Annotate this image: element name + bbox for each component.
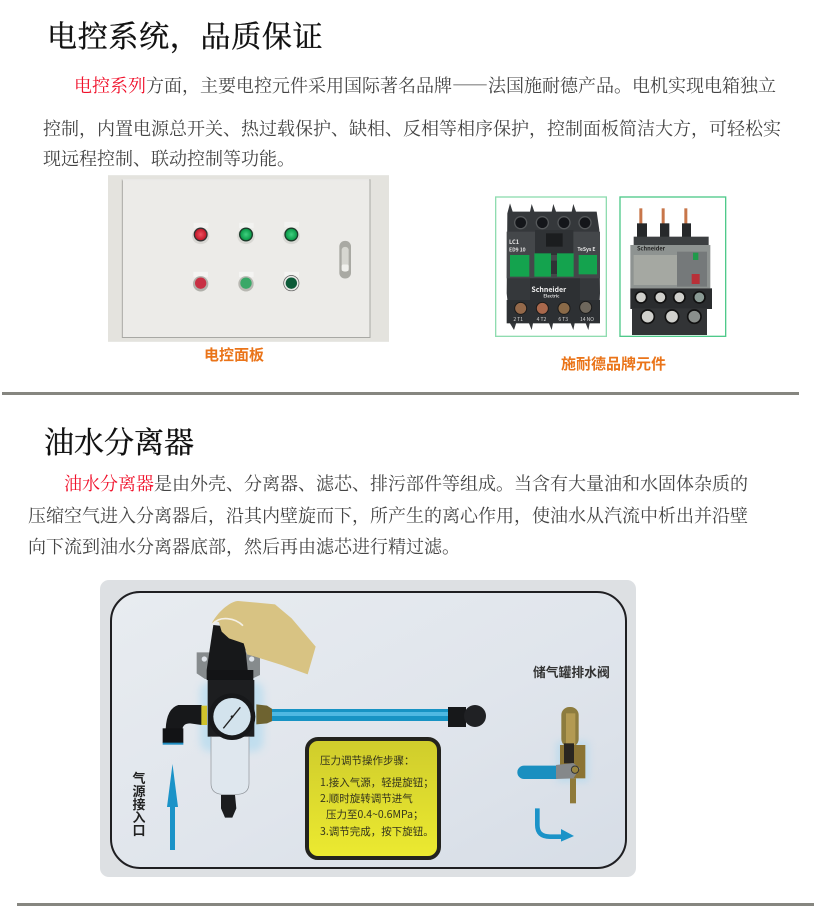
label: air inlet: 源 [132, 781, 146, 800]
callout: pressure adjustment steps: 压力至0.4~0.6MPa； [326, 807, 424, 822]
image: Schneider contactor: Schneider [531, 285, 567, 295]
divider [17, 903, 814, 906]
image: Schneider thermal relay [619, 196, 726, 337]
image: Schneider contactor: TeSys E [577, 246, 596, 253]
icon: drain valve [517, 707, 588, 803]
callout: pressure adjustment steps: 压力调节操作步骤： [320, 753, 414, 768]
panel: separator instruction plate [100, 580, 636, 877]
callout: pressure adjustment steps: 1.接入气源，轻提旋钮； [320, 775, 434, 790]
pressure regulator with hand [163, 601, 316, 818]
air hose [272, 705, 486, 727]
label: air inlet: 气 [132, 768, 146, 787]
image: Schneider contactor [495, 196, 607, 337]
image: Schneider contactor: Electric [543, 292, 560, 299]
divider [2, 392, 799, 395]
elbow fitting [166, 705, 202, 729]
title: oil water separator: 油水分离器 [44, 418, 194, 462]
arrow: drain direction [537, 808, 574, 842]
text block: electrical control description [43, 72, 781, 171]
door handle [339, 241, 351, 278]
image: Schneider contactor: 6 T3 [558, 316, 568, 323]
arrow: air inlet [167, 764, 178, 850]
label: tank drain valve: 储气罐排水阀 [533, 662, 610, 681]
callout: pressure adjustment steps [307, 739, 439, 858]
image: Schneider contactor: LC1 [509, 237, 519, 246]
image: Schneider contactor: ED9 10 [509, 246, 526, 253]
image: Schneider contactor: 2 T1 [513, 316, 523, 323]
image: Schneider contactor: 14 NO [580, 316, 594, 323]
text block: separator description: 向下流到油水分离器底部，然后再由滤芯进行精过滤。 [28, 533, 460, 559]
text block: electrical control description: 电控系列方面，主要电控元件采用国际著名品牌——法国施耐德产品。电机实现电箱独立 [74, 72, 776, 98]
panel: control panel photo [108, 175, 389, 342]
title: electrical control: 电控系统，品质保证 [47, 12, 323, 56]
label: air inlet: 接 [132, 794, 146, 813]
text block: separator description: 油水分离器是由外壳、分离器、滤芯、排污部件等组成。当含有大量油和水固体杂质的 [64, 470, 748, 496]
label: air inlet: 入 [132, 807, 146, 826]
label: air inlet: 口 [132, 820, 146, 839]
image: Schneider contactor: 4 T2 [537, 316, 547, 323]
caption: control panel: 电控面板 [204, 347, 264, 364]
indicator buttons [192, 222, 300, 292]
callout: pressure adjustment steps: 2.顺时旋转调节进气 [320, 791, 413, 806]
text block: electrical control description: 控制，内置电源总开关、热过载保护、缺相、反相等相序保护，控制面板简洁大方，可轻松实 [43, 115, 781, 141]
text block: separator description [28, 470, 748, 559]
image: Schneider thermal relay: Schneider [637, 244, 666, 253]
text block: separator description: 压缩空气进入分离器后，沿其内壁旋而下，所产生的离心作用，使油水从汽流中析出并沿壁 [28, 502, 748, 528]
callout: pressure adjustment steps: 3.调节完成，按下旋钮。 [320, 824, 434, 839]
caption: Schneider brand components: 施耐德品牌元件 [561, 356, 666, 373]
text block: electrical control description: 现远程控制、联动控制等功能。 [43, 145, 295, 171]
pressure gauge [209, 693, 255, 740]
label: air inlet [132, 768, 146, 839]
